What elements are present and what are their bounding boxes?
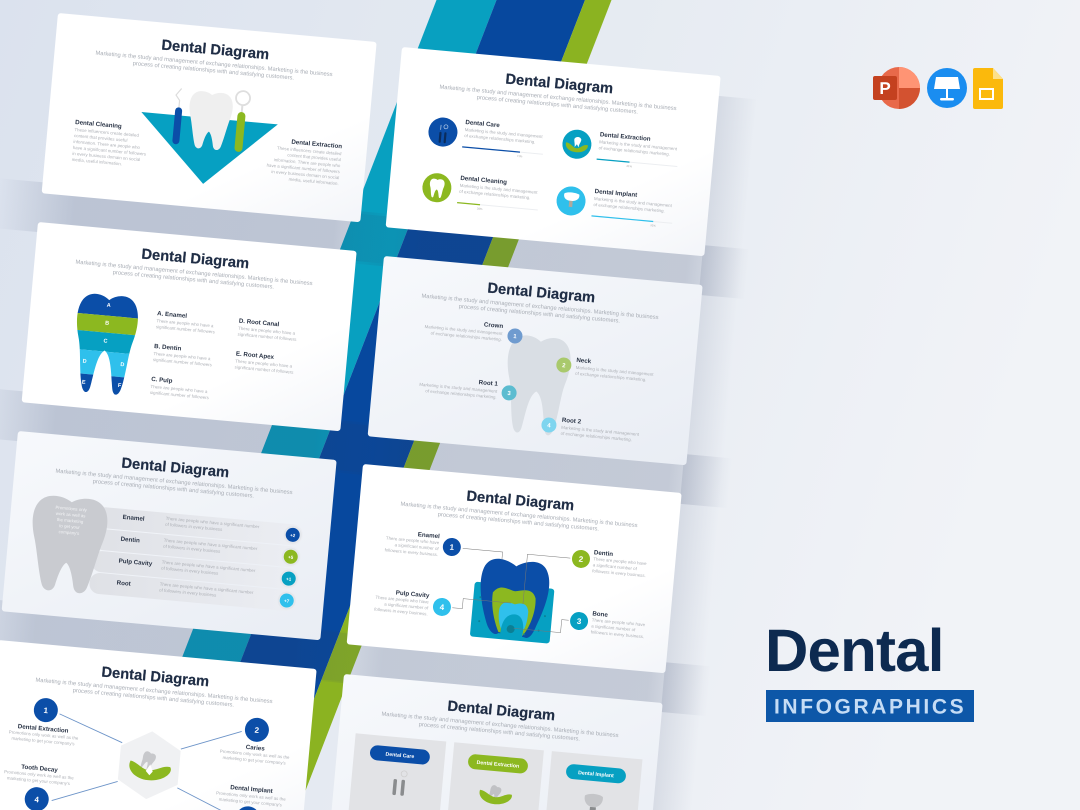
dental extraction item: 41% — [626, 164, 633, 168]
layer letters: A — [106, 303, 111, 309]
slide 1: dental instruments triangle — [42, 13, 377, 222]
dental extraction text: These influencers create detailed — [277, 145, 342, 156]
icon: keynote — [927, 68, 967, 108]
marker 1: 1 — [513, 333, 518, 340]
icon: powerpoint: P — [879, 79, 891, 98]
node 4: 4 — [34, 795, 40, 804]
row 3: +1 — [286, 576, 292, 582]
slide 5 subtitle: process of creating relationships with and satisfying customers. — [92, 478, 255, 500]
slide 2 subtitle: process of creating relationships with and satisfying customers. — [476, 94, 639, 116]
grey tooth with text: the marketing — [57, 517, 84, 524]
main heading: Dental — [765, 617, 944, 684]
icon: google slides — [973, 68, 1003, 109]
slide 8 subtitle: process of creating relationships with and satisfying customers. — [418, 721, 581, 743]
callout 3 bone: followers in every business. — [590, 629, 644, 639]
slide 8: three columns — [328, 674, 663, 810]
A. Enamel: There are people who have a — [156, 318, 214, 328]
dental extraction node text: Dental Extraction — [17, 723, 69, 735]
dental extraction text: in every business domain on social — [271, 169, 339, 180]
connector lines — [52, 714, 242, 810]
software icons — [873, 67, 1003, 109]
row backgrounds — [89, 506, 304, 612]
dental implant item: Dental Implant — [594, 188, 637, 199]
callout 2 dentin: 2 — [578, 555, 584, 564]
B. Dentin: B. Dentin — [154, 343, 182, 353]
dental extraction node text — [8, 722, 80, 747]
slide 6 subtitle: process of creating relationships with and satisfying customers. — [437, 511, 600, 533]
callout 1 enamel — [384, 528, 462, 559]
row 4: There are people who have a significant number — [159, 581, 254, 595]
slide 3 subtitle: Marketing is the study and management of exchange relationships. Marketing is the business — [75, 259, 313, 287]
row 1: +2 — [290, 533, 296, 538]
crown text: of exchange relationships marketing. — [430, 331, 502, 342]
grey tooth with text: Promotions only — [55, 505, 88, 513]
dental implant text: Dental Implant — [230, 784, 273, 795]
slide 7 title: Dental Diagram — [101, 665, 210, 690]
grey tooth with text: to get your — [59, 523, 81, 530]
crown text: Marketing is the study and management — [424, 324, 503, 336]
callout 1 enamel: 1 — [449, 543, 455, 552]
row 1 — [122, 510, 302, 545]
root 2 text: Marketing is the study and management — [561, 425, 640, 437]
D. Root Canal: significant number of followers — [237, 332, 298, 342]
node 2 — [244, 717, 270, 743]
dental probe — [172, 88, 184, 145]
D. Root Canal: D. Root Canal — [239, 318, 280, 328]
node 3 — [235, 805, 261, 810]
callout 1 enamel: followers in every business. — [384, 547, 438, 557]
C. Pulp: There are people who have a — [150, 384, 208, 394]
tooth in gum cross-section — [470, 557, 557, 644]
marker 4: 4 — [547, 422, 552, 429]
callout 1 enamel: Enamel — [417, 531, 440, 540]
dental extraction node text: marketing to get your company's — [11, 736, 76, 746]
dental extraction item: Marketing is the study and management — [599, 139, 678, 151]
connector lines — [451, 548, 574, 633]
A. Enamel: significant number of followers — [156, 324, 216, 335]
marker 1 — [507, 328, 523, 344]
slide 6: tooth cross-section — [347, 464, 682, 673]
dental care item: Marketing is the study and management — [465, 127, 544, 139]
dental cleaning text: These influencers create detailed — [74, 127, 140, 138]
dental cleaning text: information. There are people who — [73, 139, 141, 150]
column 3 dental implant — [542, 751, 642, 810]
slide 1 subtitle: process of creating relationships with and satisfying customers. — [132, 60, 295, 82]
crown text — [424, 316, 504, 342]
C. Pulp: C. Pulp — [151, 376, 173, 385]
dental cleaning item: of exchange relationships marketing. — [459, 189, 531, 200]
column 1 dental care — [346, 733, 446, 810]
dental extraction item: of exchange relationships marketing. — [598, 145, 670, 157]
row 3: Pulp Cavity — [118, 558, 153, 568]
callout 1 enamel: a significant number of — [394, 542, 440, 551]
dental extraction text — [265, 137, 343, 186]
dental cleaning text: in every business domain on social — [72, 151, 140, 162]
slide 2: four services with progress bars — [386, 47, 721, 256]
layer letters: F — [118, 383, 122, 389]
A. Enamel — [156, 310, 217, 335]
node 1 — [33, 697, 59, 723]
dental implant item — [555, 185, 675, 229]
layer letters: E — [82, 380, 86, 386]
callout 3 bone: a significant number of — [591, 623, 636, 632]
dental extraction text: have a significant number of followers — [266, 163, 341, 174]
dental extraction item: Dental Extraction — [600, 131, 651, 143]
triangle — [135, 112, 278, 190]
callout 2 dentin: a significant number of — [593, 562, 638, 571]
dental care item: of exchange relationships marketing. — [464, 133, 536, 144]
root 1 text: Marketing is the study and management — [419, 382, 498, 394]
row 3 — [118, 554, 299, 588]
callout 4 pulp cavity: a significant number of — [384, 602, 429, 611]
row 2: +5 — [288, 555, 294, 560]
row 1: Enamel — [122, 514, 145, 523]
dental extraction text: content that provides useful — [287, 152, 341, 162]
callout 2 dentin: There are people who have — [593, 556, 647, 566]
dental cleaning text: content that provides useful — [74, 133, 128, 143]
layer letters: B — [105, 321, 109, 327]
root 1 text: Root 1 — [478, 379, 499, 388]
slide 3: tooth layers — [22, 222, 357, 431]
dental cleaning item: Dental Cleaning — [460, 175, 507, 186]
dental extraction item — [561, 128, 680, 172]
B. Dentin: There are people who have a — [153, 351, 211, 361]
callout 3 bone: Bone — [592, 610, 609, 619]
E. Root Apex: significant number of followers — [234, 364, 295, 375]
layered tooth — [76, 294, 138, 395]
callout 2 dentin — [571, 547, 648, 578]
slide 4 subtitle: Marketing is the study and management of exchange relationships. Marketing is the business — [421, 293, 659, 321]
root 2 text — [560, 417, 641, 443]
callout 4 pulp cavity: There are people who have — [375, 595, 430, 605]
dental mirror — [231, 91, 251, 153]
infographics banner: INFOGRAPHICS — [774, 696, 966, 718]
callout 2 dentin: followers in every business. — [592, 568, 646, 578]
slide 5 title: Dental Diagram — [121, 456, 230, 481]
column 2 dental extraction: Dental Extraction — [476, 760, 519, 770]
E. Root Apex: There are people who have a — [235, 358, 293, 369]
E. Root Apex — [234, 350, 296, 375]
dental implant text — [215, 783, 287, 808]
marker 3 — [501, 385, 517, 401]
caries text: marketing to get your company's — [222, 755, 287, 766]
slide 4 title: Dental Diagram — [487, 281, 596, 306]
slide 7 subtitle: process of creating relationships with and satisfying customers. — [72, 687, 235, 709]
slide 7: hexagon hub — [0, 640, 317, 810]
row 1: There are people who have a significant number — [165, 516, 260, 529]
node 2: 2 — [254, 726, 260, 735]
layer letters: D — [120, 362, 125, 368]
dental implant item: 76% — [650, 223, 656, 228]
row 2: of followers in every business — [163, 544, 221, 554]
layer letters: C — [103, 338, 108, 345]
callout 3 bone — [569, 608, 646, 639]
callout 1 enamel: There are people who have — [386, 535, 440, 545]
grey tooth with text: company's — [58, 529, 80, 536]
dental extraction text: information. There are people who — [274, 157, 341, 168]
neck text: of exchange relationships marketing. — [575, 371, 647, 382]
dental implant item: of exchange relationships marketing. — [593, 202, 665, 213]
marker 2: 2 — [562, 362, 566, 369]
row 2 — [120, 532, 301, 567]
root 2 text: Root 2 — [562, 417, 582, 426]
tooth decay text: Promotions only work as well as the — [4, 769, 74, 780]
column 3 dental implant: Dental Implant — [578, 770, 614, 779]
extraction icon — [128, 749, 172, 782]
slide 3 title: Dental Diagram — [141, 247, 250, 272]
root 1 text — [419, 374, 499, 400]
callout 3 bone: 3 — [576, 617, 582, 626]
slide 2 subtitle: Marketing is the study and management of exchange relationships. Marketing is the business — [439, 84, 677, 112]
C. Pulp: significant number of followers — [150, 390, 210, 400]
slide 5: tooth table — [2, 431, 337, 640]
root 2 text: of exchange relationships marketing. — [560, 431, 632, 442]
infographics banner — [766, 690, 974, 722]
E. Root Apex: E. Root Apex — [236, 350, 275, 361]
dental care item — [427, 116, 545, 160]
slide 5 subtitle: Marketing is the study and management of exchange relationships. Marketing is the business — [55, 468, 293, 496]
tooth decay text: marketing to get your company's — [7, 775, 71, 786]
slide 1 title: Dental Diagram — [161, 38, 270, 63]
node 1: 1 — [43, 706, 49, 715]
tooth decay text: Tooth Decay — [21, 764, 59, 774]
row 4 — [116, 576, 297, 610]
dental extraction node text: Promotions only work as well as the — [9, 729, 79, 741]
neck text: Marketing is the study and management — [575, 365, 654, 377]
C. Pulp — [150, 376, 211, 400]
dental cleaning text: have a significant number of followers — [73, 145, 147, 157]
soft shadows between slides — [0, 96, 757, 810]
caries text: Caries — [246, 744, 266, 753]
A. Enamel: A. Enamel — [157, 310, 188, 320]
callout 4 pulp cavity: 4 — [439, 603, 445, 612]
dental care item: Dental Care — [465, 119, 501, 129]
row 4: Root — [116, 580, 131, 588]
dental care item: 71% — [517, 154, 523, 158]
dental cleaning item: 28% — [477, 206, 483, 211]
callout 4 pulp cavity: followers in every business. — [374, 607, 428, 616]
dental cleaning item: Marketing is the study and management — [459, 183, 538, 195]
dental cleaning text: Dental Cleaning — [75, 119, 122, 130]
dental implant text: Promotions only work as well as the — [216, 790, 286, 802]
slide 1 subtitle: Marketing is the study and management of exchange relationships. Marketing is the business — [95, 50, 333, 78]
column 2 dental extraction — [444, 742, 544, 810]
root 1 text: of exchange relationships marketing. — [425, 388, 497, 400]
row 4: of followers in every business — [159, 587, 217, 598]
D. Root Canal — [237, 318, 299, 342]
B. Dentin: significant number of followers — [153, 357, 213, 367]
slide 7 subtitle: Marketing is the study and management of exchange relationships. Marketing is the business — [35, 677, 273, 705]
slide 6 title: Dental Diagram — [466, 489, 575, 514]
column 1 dental care: Dental Care — [385, 752, 415, 760]
callout 4 pulp cavity — [374, 588, 452, 619]
dental cleaning item — [421, 171, 540, 216]
dental cleaning text: media, useful information. — [72, 157, 122, 166]
caries text: Promotions only work as well as the — [220, 749, 290, 760]
dental extraction text: media, useful information. — [288, 177, 339, 186]
slide 8 subtitle: Marketing is the study and management of exchange relationships. Marketing is the business — [381, 711, 619, 739]
marker 2 — [556, 357, 572, 373]
callout 2 dentin: Dentin — [594, 549, 614, 558]
slide 4 subtitle: process of creating relationships with and satisfying customers. — [458, 303, 621, 325]
marker 3: 3 — [507, 390, 512, 397]
callout 3 bone: There are people who have — [592, 617, 646, 627]
slide 6 subtitle: Marketing is the study and management of exchange relationships. Marketing is the business — [400, 501, 638, 529]
grey tooth with text — [26, 494, 109, 595]
row 1: of followers in every business — [165, 522, 223, 532]
dental implant item: Marketing is the study and management — [594, 196, 673, 208]
dental cleaning text — [72, 119, 149, 169]
grey tooth — [501, 334, 573, 437]
row 3: There are people who have a significant number — [161, 560, 256, 573]
neck text: Neck — [576, 357, 592, 365]
dental implant text: marketing to get your company's — [219, 797, 283, 807]
layer letters — [80, 301, 130, 389]
slide 8 title: Dental Diagram — [447, 699, 556, 724]
crown text: Crown — [484, 321, 504, 330]
row 2: Dentin — [120, 536, 140, 544]
slide 4: tooth anatomy labels — [368, 256, 703, 465]
B. Dentin — [153, 343, 214, 367]
slide 2 title: Dental Diagram — [505, 72, 614, 97]
tooth — [186, 90, 234, 151]
row 3: of followers in every business — [161, 566, 219, 576]
diagonal colour stripes — [123, 0, 612, 810]
row 4: +7 — [284, 598, 290, 604]
neck text — [575, 357, 655, 383]
dental extraction text: Dental Extraction — [291, 139, 343, 150]
caries text — [219, 742, 291, 766]
layer letters: D — [82, 359, 87, 365]
callout 4 pulp cavity: Pulp Cavity — [395, 590, 430, 600]
node 4 — [24, 786, 50, 810]
grey tooth with text: work as well as — [56, 511, 86, 519]
slide 3 subtitle: process of creating relationships with and satisfying customers. — [112, 269, 275, 291]
D. Root Canal: There are people who have a — [238, 326, 296, 336]
tooth decay text — [3, 762, 75, 786]
row 2: There are people who have a significant number — [163, 538, 258, 551]
hexagon — [116, 729, 182, 802]
marker 4 — [541, 417, 557, 433]
